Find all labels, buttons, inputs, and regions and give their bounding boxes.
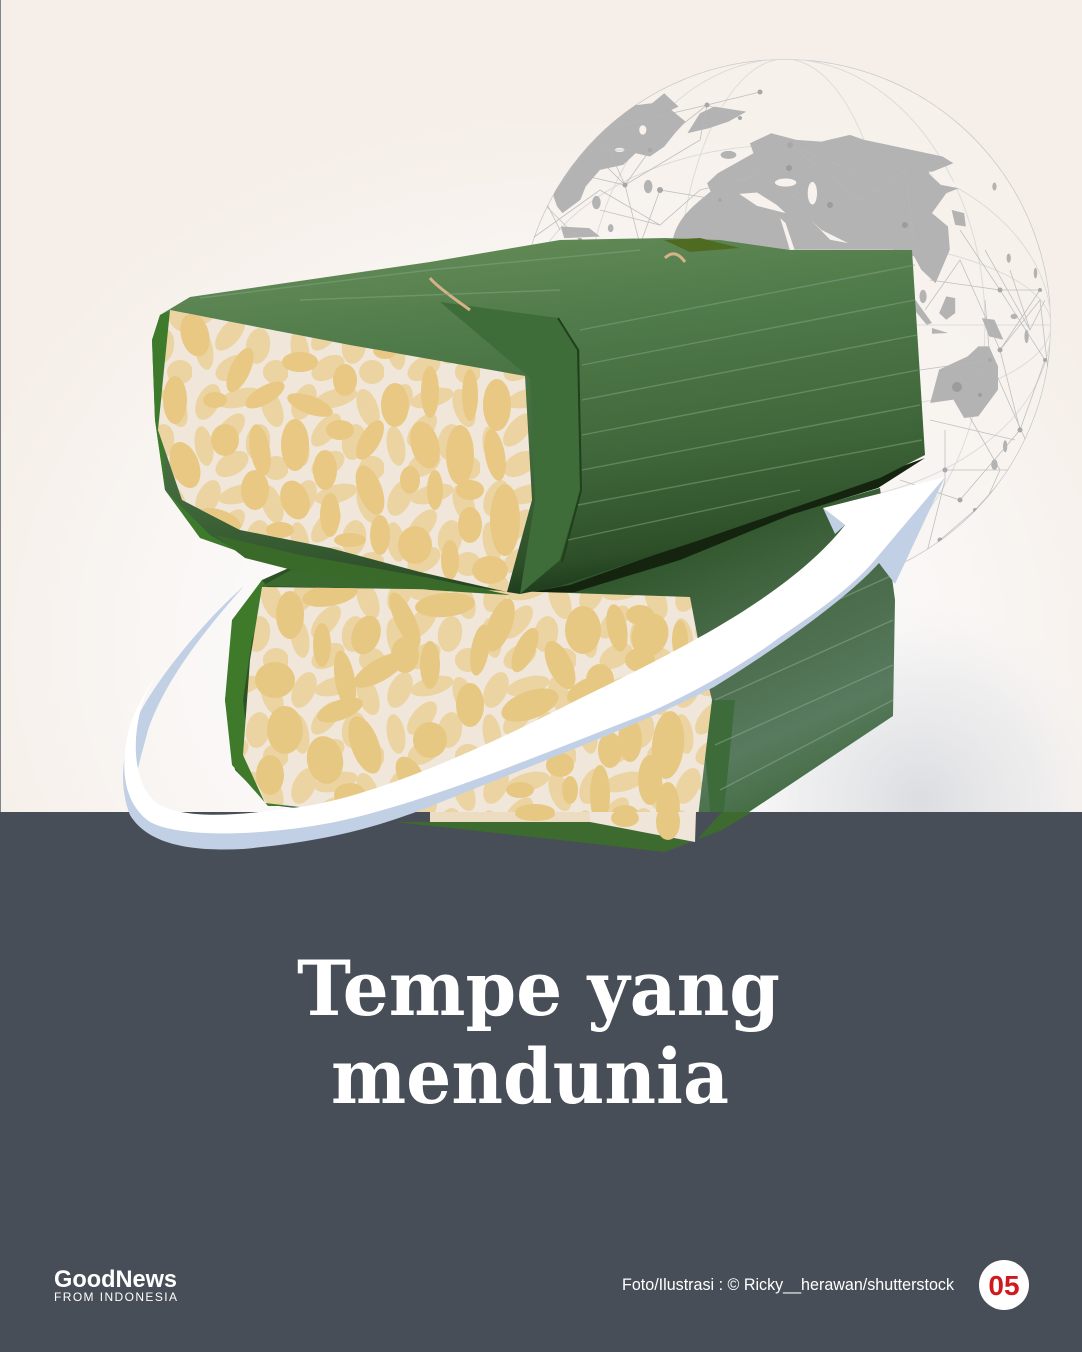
arrow shadow ribbon xyxy=(123,477,945,849)
network lines xyxy=(530,70,1048,560)
arrow body xyxy=(124,477,945,833)
photo background xyxy=(0,0,1082,812)
floor shadow xyxy=(700,590,1082,812)
title: mendunia xyxy=(331,1032,729,1121)
globe illustration xyxy=(519,59,1051,591)
arrow barb shadow xyxy=(823,508,845,534)
lower block leaf wrap xyxy=(225,488,895,852)
upper tempeh block xyxy=(152,238,925,595)
logo: GoodNews from Indonesia: FROM INDONESIA xyxy=(54,1290,177,1304)
title xyxy=(297,944,780,1121)
inland seas xyxy=(615,125,959,250)
upper block cut face xyxy=(158,310,532,592)
leaf tie xyxy=(664,238,740,252)
upper block leaf wrap xyxy=(152,238,925,594)
page number badge: 05 xyxy=(988,1270,1020,1301)
page number badge xyxy=(979,1260,1029,1310)
lower tempeh block xyxy=(225,458,925,812)
lower block cut face xyxy=(243,587,712,812)
leaf sleeve xyxy=(440,302,580,594)
photo credit: Foto/Ilustrasi : © Ricky__herawan/shutterstock xyxy=(622,1276,955,1294)
lower block overlap onto dark panel xyxy=(395,804,752,852)
under-block shadow xyxy=(520,458,925,594)
dark lower panel xyxy=(0,812,1082,1352)
logo: GoodNews from Indonesia: GoodNews xyxy=(54,1266,177,1293)
title: Tempe yang xyxy=(297,944,780,1033)
rising arrow orbit xyxy=(123,477,945,849)
land masses xyxy=(554,93,1037,470)
